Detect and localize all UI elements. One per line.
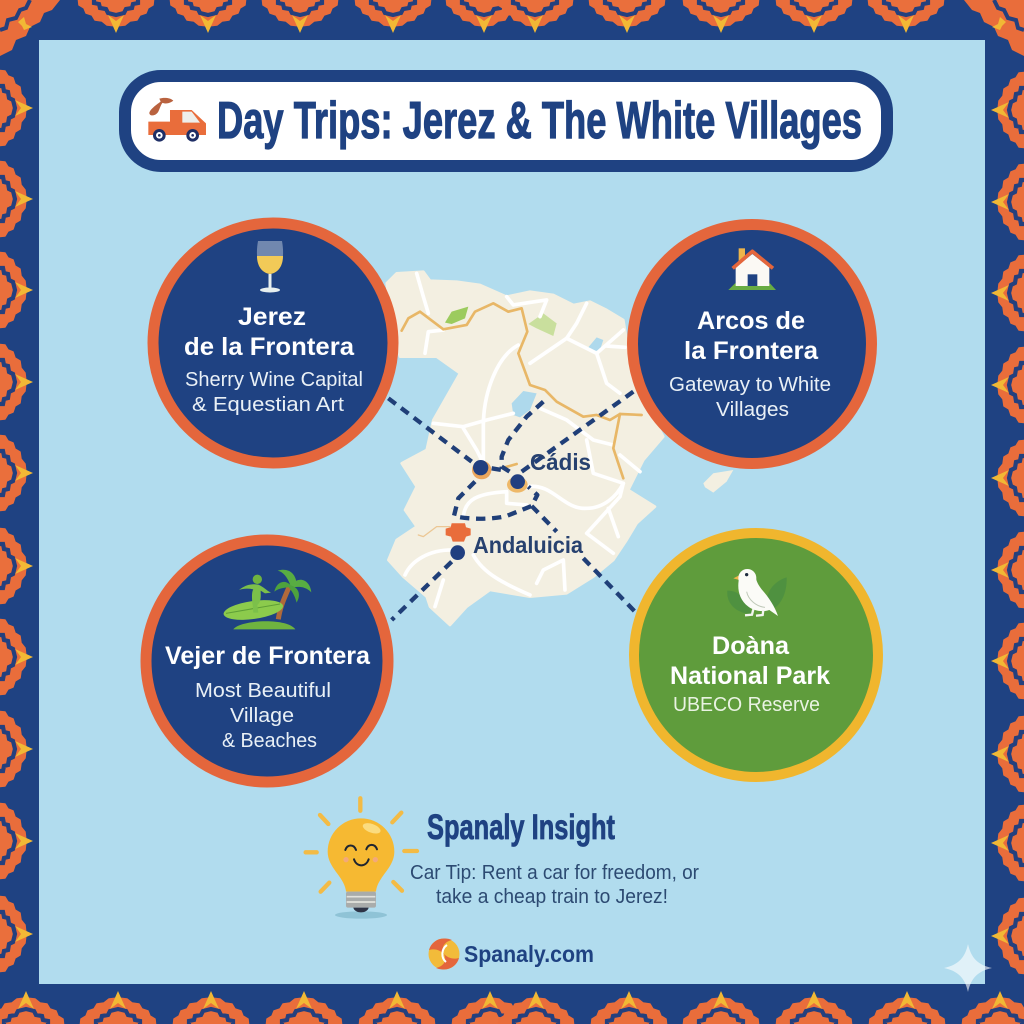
sparkle watermark [944,944,992,992]
description: UBECO Reserve [673,694,820,716]
panel: Vejer de Frontera [146,540,388,782]
logo: Spanaly.com [428,938,594,970]
panel: Arcos de la Frontera: la Frontera [684,337,819,365]
map island [703,470,733,493]
map land [387,272,663,625]
description: Sherry Wine Capital [185,369,363,391]
icon: house [728,248,776,290]
route dashed lines [388,392,635,620]
map label: Andalucia: Andaluicia [473,532,583,558]
icon: delivery truck [148,98,206,142]
heading: Doàna [712,632,790,660]
callout heading: Spanaly Insight [427,808,615,847]
map parks [445,307,468,324]
icon: smiling light bulb [306,798,417,919]
description: Most Beautiful [195,680,331,702]
map white roads [405,273,640,607]
icon: wine glass [257,241,283,292]
callout body: Car Tip: Rent a car for freedom, or [410,862,699,884]
map location marker: orange cross [446,523,471,542]
heading: Vejer de Frontera [165,642,371,670]
panel: Vejer de Frontera: Village [230,705,294,727]
heading: Arcos de [697,307,805,335]
panel: Donana National Park: National Park [670,662,830,690]
map lakes [512,337,603,417]
map location dots [450,460,528,560]
panel: Arcos de la Frontera [632,224,872,464]
icon: white bird with leaves [727,569,787,616]
callout: Spanaly Insight: take a cheap train to Jerez! [436,886,668,908]
panel: Jerez de la Frontera: & Equestian Art [192,394,344,416]
map tan highways [402,303,642,537]
panel: Donana National Park [634,533,878,777]
description: Gateway to White [669,374,831,396]
panel: Jerez de la Frontera [153,223,393,463]
panel: Vejer de Frontera: & Beaches [222,730,317,752]
callout: Spanaly Insight [306,798,699,919]
logo text: Spanaly.com [464,941,594,967]
map of Spain [387,272,733,625]
panel: Jerez de la Frontera: de la Frontera [184,333,355,361]
panel: Arcos de la Frontera: Villages [716,399,789,421]
heading: Jerez [238,303,306,331]
icon: swirl logo [428,938,460,970]
map label: Cadis: Cádis [530,449,591,475]
title banner [125,76,887,166]
icon: surfer and palm [222,570,311,629]
